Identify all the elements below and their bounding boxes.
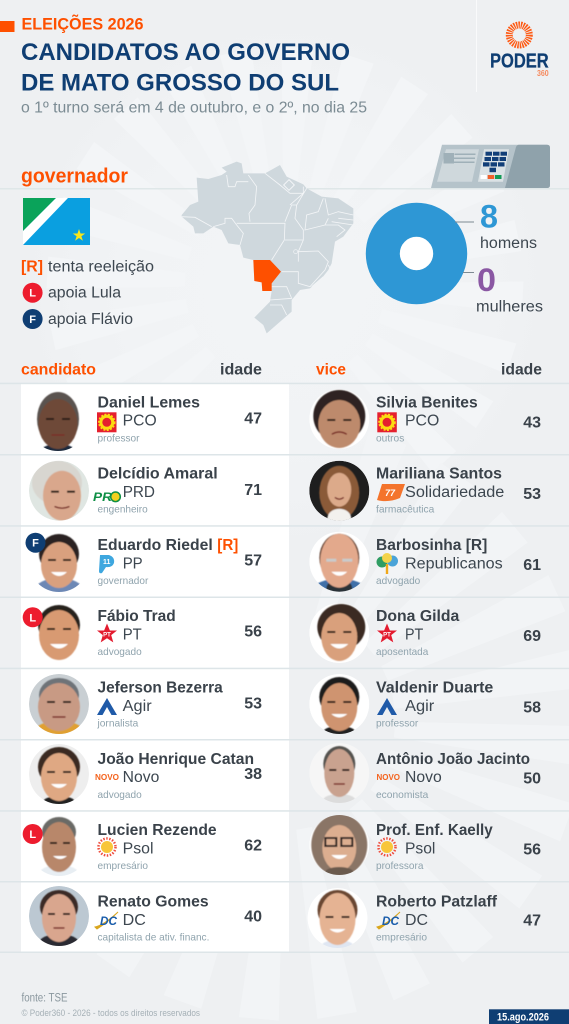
portrait — [310, 532, 369, 592]
row: Lucien Rezende: 62 — [244, 838, 262, 855]
row: João Henrique Catan — [29, 744, 262, 808]
row: Prof. Enf. Kaelly: 56 — [523, 842, 541, 859]
row: Eduardo Riedel: 57 — [244, 553, 262, 570]
row: Fábio Trad: Fábio Trad — [98, 608, 176, 625]
title — [21, 39, 350, 96]
count: women: 0 — [477, 262, 496, 298]
row: Roberto Patzlaff: empresário — [376, 931, 427, 943]
portrait — [309, 814, 369, 877]
table headers: vice — [316, 362, 346, 379]
row: Valdenir Duarte: professor — [376, 718, 419, 730]
row: Valdenir Duarte: 58 — [523, 699, 541, 716]
title: DE MATO GROSSO DO SUL — [21, 70, 339, 96]
row: Renato Gomes: Renato Gomes — [98, 893, 209, 910]
row: João Henrique Catan: advogado — [98, 789, 142, 801]
row: Barbosinha: 61 — [523, 557, 541, 574]
row: Prof. Enf. Kaelly: Prof. Enf. Kaelly — [376, 822, 493, 839]
row: Silvia Benites: 43 — [523, 415, 541, 432]
date tag — [489, 1009, 569, 1024]
icon: voting machine — [431, 145, 550, 188]
portrait — [37, 392, 79, 456]
legend: tenta reeleição — [48, 259, 154, 276]
logo: PRD — [93, 492, 120, 504]
portrait — [41, 816, 77, 876]
logo: PRD: PR — [93, 492, 113, 504]
row: João Henrique Catan: João Henrique Catan — [98, 751, 254, 768]
logo: Republicanos — [376, 553, 398, 574]
portrait — [309, 460, 370, 521]
row: Roberto Patzlaff: DC — [405, 912, 428, 929]
logo: PT — [377, 624, 397, 642]
portrait — [29, 461, 89, 521]
row: Antônio João Jacinto: 50 — [523, 770, 541, 787]
logo: Poder360: PODER — [490, 50, 549, 72]
row: Lucien Rezende: Lucien Rezende — [98, 822, 217, 839]
subtitle: o 1º turno será em 4 de outubro, e o 2º, no dia 25 — [21, 100, 367, 117]
date tag: 15.ago.2026 — [497, 1012, 549, 1024]
row: Valdenir Duarte — [309, 674, 541, 738]
legend: apoia Flávio — [48, 311, 133, 328]
row: Jeferson Bezerra: Agir — [123, 698, 152, 715]
badge: supports Flávio: F — [32, 538, 39, 550]
row: Dona Gilda: aposentada — [376, 646, 428, 658]
row: Silvia Benites: Silvia Benites — [376, 394, 478, 411]
row: Antônio João Jacinto: economista — [376, 789, 428, 801]
row: Renato Gomes: 40 — [244, 909, 262, 926]
logo: PCO — [97, 412, 116, 432]
row: Antônio João Jacinto: Novo — [405, 769, 442, 786]
logo: Psol — [98, 838, 116, 856]
row: Dona Gilda — [309, 603, 541, 663]
logo: PCO — [377, 412, 397, 432]
row: Eduardo Riedel: PP — [123, 555, 143, 572]
table headers — [21, 362, 542, 379]
logo: Poder360: 360 — [537, 69, 549, 78]
title: CANDIDATOS AO GOVERNO — [21, 39, 350, 66]
row: Renato Gomes: DC — [123, 912, 146, 929]
donut chart — [383, 220, 450, 287]
portrait — [309, 389, 369, 449]
row: Renato Gomes — [29, 886, 262, 952]
badge: supports Lula — [23, 607, 43, 627]
logo: PT: PT — [103, 632, 111, 638]
count: women — [463, 262, 543, 316]
heading: governador: governador — [21, 166, 128, 188]
row: Valdenir Duarte: Valdenir Duarte — [376, 680, 494, 696]
row: Delcídio Amaral — [29, 461, 262, 521]
table headers: idade — [501, 362, 542, 379]
row: Dona Gilda: Dona Gilda — [376, 608, 460, 625]
logo: Agir — [377, 698, 397, 715]
table headers: idade — [220, 362, 262, 379]
row: Mariliana Santos — [309, 460, 540, 521]
logo: Novo: NOVO — [95, 773, 119, 782]
row: Jeferson Bezerra: Jeferson Bezerra — [98, 680, 223, 696]
row: Barbosinha: Republicanos — [405, 555, 503, 572]
row: Fábio Trad: advogado — [98, 646, 142, 658]
row: Delcídio Amaral: engenheiro — [98, 504, 148, 516]
copyright: © Poder360 - 2026 - todos os direitos reservados — [22, 1008, 200, 1019]
count: men: 8 — [480, 199, 498, 235]
row: Silvia Benites: outros — [376, 432, 404, 444]
header accent block — [0, 21, 14, 32]
row: Prof. Enf. Kaelly — [309, 814, 541, 877]
portrait — [322, 745, 356, 803]
row: Lucien Rezende — [23, 817, 262, 883]
row: Lucien Rezende: empresário — [98, 860, 148, 872]
row: Barbosinha: Barbosinha [R] — [376, 537, 487, 554]
row: Eduardo Riedel — [26, 532, 262, 592]
logo: Solidariedade: 77 — [385, 488, 396, 498]
row: Fábio Trad — [23, 605, 262, 660]
row: Lucien Rezende: Psol — [123, 840, 154, 858]
row: Renato Gomes: capitalista de ativ. financ. — [98, 931, 209, 943]
kicker: ELEIÇÕES 2026 — [22, 14, 144, 34]
logo: DC — [95, 912, 118, 929]
table headers: candidato — [21, 362, 96, 379]
row: Daniel Lemes: 47 — [244, 410, 262, 427]
flag of Mato Grosso do Sul — [23, 198, 90, 245]
badge: supports Flávio — [26, 533, 46, 553]
row: Prof. Enf. Kaelly: professora — [376, 860, 424, 872]
row: Barbosinha — [310, 532, 541, 592]
row: Delcídio Amaral: PRD — [123, 484, 155, 501]
portrait — [309, 603, 369, 663]
row: João Henrique Catan: 38 — [244, 766, 262, 783]
logo: Solidariedade — [377, 484, 405, 501]
portrait — [38, 533, 80, 592]
portrait — [308, 888, 368, 952]
row: Eduardo Riedel: governador — [98, 575, 149, 587]
portrait — [38, 605, 80, 660]
row: Daniel Lemes: Daniel Lemes — [98, 394, 200, 411]
row: Dona Gilda: PT — [405, 627, 424, 644]
count: women: mulheres — [476, 299, 543, 316]
row: João Henrique Catan: Novo — [123, 769, 159, 786]
logo: Psol — [378, 838, 396, 856]
logo: Poder360 — [490, 25, 549, 78]
portrait — [29, 674, 89, 734]
row: Jeferson Bezerra: 53 — [244, 695, 262, 712]
logo: PT — [97, 624, 117, 642]
badge: supports Lula: L — [29, 829, 36, 841]
row: Silvia Benites: PCO — [405, 413, 439, 430]
portrait — [309, 674, 369, 738]
logo: Novo: NOVO — [376, 773, 400, 782]
row: Delcídio Amaral: 71 — [244, 482, 262, 499]
logo: PT: PT — [383, 632, 391, 638]
map of Brazil — [182, 162, 353, 333]
panel: candidates column — [21, 384, 289, 952]
row: Antônio João Jacinto: Antônio João Jacinto — [376, 751, 530, 768]
count: men: homens — [480, 235, 537, 252]
row: Fábio Trad: PT — [123, 627, 142, 644]
row: Dona Gilda: 69 — [523, 628, 541, 645]
row: Roberto Patzlaff: Roberto Patzlaff — [376, 893, 498, 910]
row: Silvia Benites — [309, 389, 541, 449]
row: Jeferson Bezerra — [29, 674, 262, 734]
row: Mariliana Santos: 53 — [523, 486, 541, 503]
row: Prof. Enf. Kaelly: Psol — [405, 840, 435, 858]
badge: supports Lula — [23, 824, 43, 844]
legend: F — [29, 314, 36, 326]
row: Roberto Patzlaff — [308, 888, 541, 952]
row: Jeferson Bezerra: jornalista — [97, 718, 138, 730]
count: men — [455, 199, 537, 252]
legend — [21, 259, 154, 329]
row: Antônio João Jacinto — [322, 745, 540, 803]
row: Mariliana Santos: farmacêutica — [376, 504, 434, 516]
logo: PP: 11 — [103, 559, 111, 566]
row: Daniel Lemes — [37, 392, 262, 456]
portrait — [29, 744, 89, 808]
row: Mariliana Santos: Mariliana Santos — [376, 466, 502, 483]
row: Delcídio Amaral: Delcídio Amaral — [98, 466, 218, 483]
row: Valdenir Duarte: Agir — [405, 698, 434, 715]
row: Daniel Lemes: professor — [98, 432, 140, 444]
logo: DC: DC — [382, 914, 399, 928]
row: Barbosinha: advogado — [376, 575, 420, 587]
badge: supports Lula: L — [29, 612, 36, 624]
source: fonte: TSE — [22, 993, 68, 1005]
row: Roberto Patzlaff: 47 — [523, 912, 541, 929]
row: Fábio Trad: 56 — [244, 624, 262, 641]
row: Eduardo Riedel: [R] — [217, 537, 238, 554]
legend: [R] — [21, 259, 43, 276]
logo: DC: DC — [100, 914, 117, 928]
legend: L — [29, 288, 36, 300]
row: Daniel Lemes: PCO — [123, 413, 157, 430]
legend: apoia Lula — [48, 285, 121, 302]
row: Mariliana Santos: Solidariedade — [405, 484, 504, 501]
logo: PP — [99, 555, 114, 573]
logo: Agir — [97, 698, 117, 715]
portrait — [29, 886, 89, 952]
logo: DC — [377, 912, 400, 929]
row: Eduardo Riedel: Eduardo Riedel — [98, 537, 213, 554]
